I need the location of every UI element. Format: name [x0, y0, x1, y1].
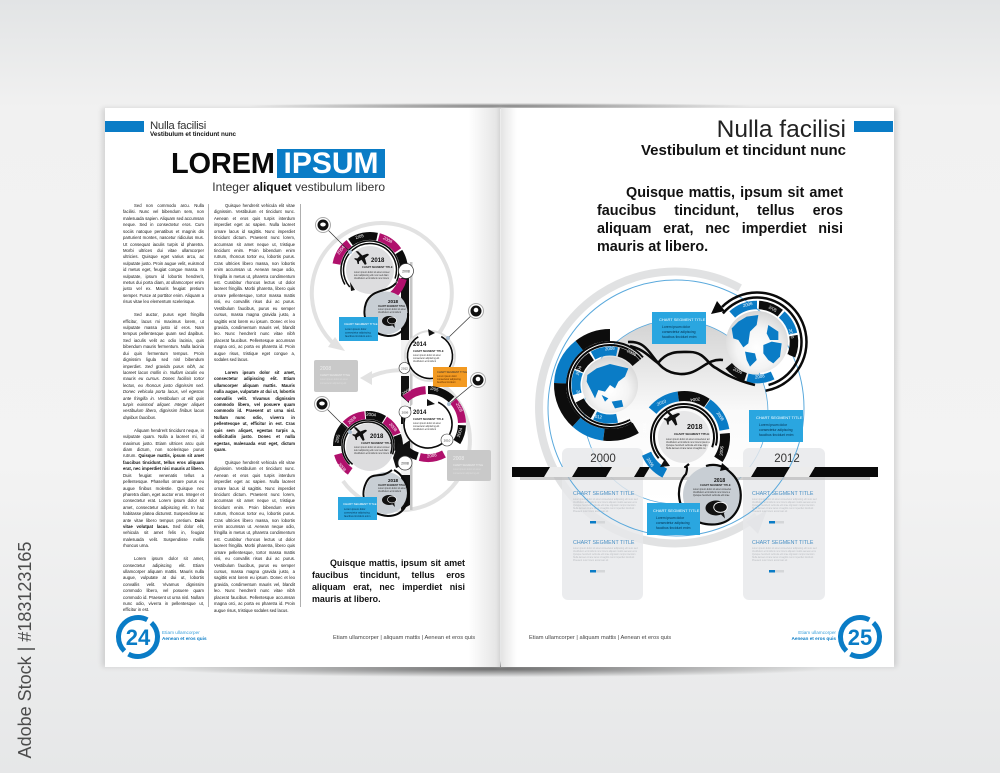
top module: 2004	[336, 244, 346, 255]
right globe module: 2010	[788, 328, 795, 340]
blue box bottom center: faucibus tincidunt enim	[656, 526, 691, 530]
blue box top center: faucibus tincidunt enim	[662, 335, 697, 339]
lower right module: 2004	[456, 427, 464, 438]
panel 2000: Vestibulum et tincidunt nunc lorem aliquam mattis aenean eros	[573, 501, 638, 504]
center module: 2010	[656, 398, 667, 407]
blue box bottom: faucibus tincidunt enim	[344, 514, 370, 518]
orange box	[433, 367, 467, 387]
center module: 2006	[719, 445, 724, 456]
panel 2012: CHART SEGMENT TITLE	[752, 491, 814, 497]
right globe continents	[732, 315, 782, 367]
orange box: CHART SEGMENT TITLE	[437, 370, 467, 374]
bottom module: Lorem ipsum dolor sit amet consectet	[693, 488, 732, 491]
panel 2012: Praesent nunc lorem accumsan sit	[752, 559, 788, 562]
text column 2: Quisque hendrerit vehicula elit vitae dignissim. Vestibulum et tincidunt nunc. Aenean et eros quis turpis interdum imperdiet eget ac sapien. Nulla laoreet ornare lacus id sagittis. Nunc imperdiet tincidunt dictum. Praesent nunc lorem, accumsan sit amet neque ut, tristique tincidunt enim. Proin bibendum enim rutrum, rhoncus tortor eu, lobortis purus. Cras ultricies libero massa, non lobortis enim accumsan ut. Aenean neque odio, fringilla in metus ut, pharetra condimentum est. Curabitur rhoncus lectus ut dolor laoreet fringilla. Morbi pharetra, libero quis ornare pellentesque, tortor massa mattis nisi, eu convallis risus dui ac purus. Vestibulum faucibus, purus eu semper cursus, massa magna gravida justo, a sagittis erat lorem eu ipsum. Donec et leo gravida, condimentum mauris vel, blandit leo. Nunc hendrerit nunc vitae nibh placerat faucibus. Pellentesque accumsan magna orci, ac porta ex pharetra id. Proin augue risus, tristique eget congue a, sodales sed lacus.	[214, 203, 295, 362]
bottom module: Vestibulum et tincidunt nunc lorem a	[693, 491, 731, 494]
center module	[626, 379, 742, 495]
left header subtitle: Vestibulum et tincidunt nunc	[150, 131, 236, 138]
top module: CHART SEGMENT TITLE	[362, 265, 393, 269]
lower right module	[380, 376, 476, 472]
lower right module: 2014	[413, 410, 427, 416]
thin blue ring	[548, 280, 804, 536]
blue box top center	[652, 312, 706, 344]
blue box bottom	[338, 497, 377, 520]
right globe module: 2006	[781, 352, 791, 364]
panel 2012: 2012	[774, 453, 800, 465]
text column 1: Aliquam hendrerit tincidunt neque, in vulputate quam. Nulla a laoreet mi, id maximus justo. Etiam ultrices arcu quis diam dictum, non scelerisque purus rutrum. Quisque mattis, ipsum sit amet faucibus tincidunt, tellus eros aliquam erat, nec imperdiet nisi mauris at libero. Duis feugiat venenatis tellus a pellentesque. Phasellus ornare purus eu augue finibus molestie. Quisque nec pharetra diam, eget auctor eros. Integer et consectetur erat. Lorem ipsum dolor sit amet, consectetur adipiscing elit. In hac habitasse platea dictumst. Suspendisse ac ante vitae libero tempus pretium. Duis vitae volutpat lacus. Sed dolor elit, vehicula sit amet felis in, feugiat malesuada velit. Suspendisse mollis rhoncus urna.	[123, 428, 204, 548]
center module: 2006	[646, 457, 655, 468]
top S-curve and lower disc: Lorem ipsum dolor sit amet	[378, 308, 406, 311]
gray box: consectetur adipiscing elit	[320, 382, 347, 385]
left infographic	[312, 218, 491, 520]
lower right module: CHART SEGMENT TITLE	[413, 417, 444, 421]
bottom module	[679, 463, 741, 524]
blue box bottom: Lorem ipsum dolor	[344, 507, 366, 511]
icon chat top	[316, 218, 352, 254]
icon chat bottom	[314, 396, 352, 434]
dividers	[208, 204, 300, 607]
left footer caption: Etiam ullamcorper	[162, 630, 200, 635]
panel 2000: CHART SEGMENT TITLE	[573, 540, 635, 546]
labels 2006 2010	[399, 406, 453, 446]
blue box right: faucibus tincidunt enim	[759, 433, 794, 437]
gray box right: 2008	[453, 456, 464, 462]
blue box right: consectetur adipiscing	[759, 428, 793, 432]
blue box top center: Lorem ipsum dolor	[662, 325, 691, 329]
panel 2000	[562, 448, 643, 600]
labels 2006 2010: 2010	[444, 438, 451, 442]
panel 2000: Vestibulum et tincidunt nunc lorem aliquam mattis aenean eros	[573, 550, 638, 553]
lower right module: 2008	[427, 452, 438, 459]
bottom-left module: tetur adipiscing elit nunc sed diam	[354, 449, 389, 452]
footer page number 24: 24	[126, 625, 151, 650]
orange box: faucibus tincidunt	[437, 381, 456, 384]
center module: 2004	[689, 397, 700, 402]
blue box top	[339, 317, 378, 341]
orange box: consectetur adipiscing	[437, 378, 461, 381]
left globe module: 2010	[576, 390, 581, 401]
bottom-left S-curve and disc: Vestibulum et tincidunt	[378, 490, 401, 493]
labels 2006 2010: 2006	[402, 410, 409, 414]
blue box bottom: consectetur adipiscing	[344, 510, 370, 514]
text column 1: Sed auctor, purus eget fringilla efficitur, lacus mi maximus lorem, ut vulputate massa justo id eros. Nam tempus pellentesque quam sed dapibus. Sed iaculis velit ac odio lacinia, quis bibendum mauris fermentum. Nulla lacinia dui quis fermentum tempus. Proin dignissim ligula sed nisl bibendum imperdiet. Sed gravida purus nibh, ac laoreet lacus mollis in. Nullam iaculis eu mauris eu cursus. Donec facilisis tortor lectus, eu rhoncus justo dignissim sed. Donec vehicula porta lacus, vel egestas ante fringilla in. Vestibulum ut elit quis turpis euismod aliquet. Integer aliquet vestibulum libero, dignissim finibus lacus dapibus faucibus.	[123, 312, 204, 420]
top S-curve and lower disc: Vestibulum et tincidunt	[378, 311, 401, 314]
lower right module: 2006	[401, 387, 412, 396]
panel 2000: Lorem ipsum dolor sit amet consectetur adipiscing elit nunc sed	[573, 547, 638, 550]
label 2008	[398, 264, 414, 278]
footer page number 25: 25	[848, 625, 872, 650]
panel 2000: CHART SEGMENT TITLE	[573, 491, 635, 497]
figure-eight connector	[628, 342, 755, 385]
blue box top center: CHART SEGMENT TITLE	[659, 317, 706, 322]
top module: 2008	[382, 235, 394, 244]
left pull quote: Quisque mattis, ipsum sit amet faucibus tincidunt, tellus eros aliquam erat, nec imperdiet nisi mauris at libero.	[312, 558, 465, 604]
panel 2012: Vestibulum et tincidunt nunc lorem aliquam mattis aenean eros	[752, 501, 817, 504]
top S-curve and lower disc: CHART SEGMENT TITLE	[378, 305, 406, 308]
bottom-left module: CHART SEGMENT TITLE	[361, 441, 392, 445]
bottom-left module: 2008	[388, 422, 399, 433]
middle module 2014: 2014	[413, 342, 427, 348]
gray box: CHART SEGMENT TITLE	[320, 373, 350, 377]
panel 2012: Nulla laoreet ornare lacus id sagittis nunc imperdiet tincidunt	[752, 556, 814, 559]
gray box right	[447, 450, 491, 481]
lower right module: Lorem ipsum dolor sit amet	[413, 422, 441, 425]
panel 2000: 2000	[590, 453, 616, 465]
gray box: Lorem ipsum dolor sit amet	[320, 378, 348, 381]
label 2012: 2012	[401, 366, 408, 370]
left globe module	[539, 314, 681, 456]
left header title: Nulla facilisi	[150, 120, 206, 132]
middle module 2014: CHART SEGMENT TITLE	[413, 349, 444, 353]
bottom-left module: 2008	[337, 462, 348, 473]
center module: Quisque hendrerit vehicula elit vitae dign	[666, 444, 708, 447]
bottom-left module: Lorem ipsum dolor sit amet consec	[354, 446, 390, 449]
blue box right: Lorem ipsum dolor	[759, 423, 788, 427]
gray box right: Lorem ipsum dolor sit amet	[453, 468, 481, 471]
headline LOREM: LOREM	[171, 148, 275, 180]
right header bar	[854, 121, 893, 132]
right infographic	[512, 271, 878, 600]
top module: Lorem ipsum dolor sit amet consec	[354, 271, 390, 274]
bottom-left module	[324, 402, 412, 490]
left page	[105, 108, 500, 667]
blue box bottom center: consectetur adipiscing	[656, 521, 690, 525]
bottom-left S-curve and disc: 2018	[388, 478, 399, 483]
right globe module: 2006	[732, 366, 744, 375]
panel 2012: Lorem ipsum dolor sit amet consectetur adipiscing elit nunc sed	[752, 547, 817, 550]
timeline strip	[512, 467, 878, 480]
top module: 2018	[371, 258, 385, 264]
icon top right	[446, 304, 484, 340]
text column 2: Lorem ipsum dolor sit amet, consectetur adipiscing elit. Etiam ullamcorper aliquam mattis. Mauris nulla augue, vulputate at dui ut, lobortis convallis velit. Vivamus dignissim commodo libero, vel posuere quam commodo id. Praesent ut urna nisl. Nullam nunc odio, viverra in pellentesque ut, efficitur in est. Cras quis sem aliquet, egestas turpis a, sollicitudin justo. Donec et nulla egestas, malesuada erat eget, dictum quam.	[214, 370, 295, 452]
panel 2000: Lorem ipsum dolor sit amet consectetur adipiscing elit nunc sed	[573, 498, 638, 501]
middle module 2014	[399, 325, 461, 387]
panel 2000: Quisque hendrerit vehicula elit vitae dignissim turpis interdum	[573, 504, 636, 507]
left header bar	[105, 121, 144, 132]
label 2008: 2008	[402, 270, 410, 274]
panel 2012: Nulla laoreet ornare lacus id sagittis nunc imperdiet tincidunt	[752, 507, 814, 510]
blue box bottom center: CHART SEGMENT TITLE	[653, 508, 700, 513]
blue box bottom: CHART SEGMENT TITLE	[343, 502, 377, 506]
panel 2000: Nulla laoreet ornare lacus id sagittis nunc imperdiet tincidunt	[573, 507, 635, 510]
center module: Nulla laoreet ornare lacus id sagittis nu	[666, 447, 706, 450]
bottom-left S-curve and disc	[363, 443, 410, 516]
center module: 2018	[687, 424, 703, 431]
bottom-left module: Vestibulum et tincidunt nunc lorem	[354, 452, 389, 455]
right footer caption	[791, 630, 836, 641]
large gray arrow arc upper	[312, 223, 452, 351]
bottom-left module: 2018	[370, 434, 384, 440]
footer page number 25	[832, 609, 888, 665]
top module	[323, 223, 417, 317]
bottom module: Quisque hendrerit vehicula elit vitae	[693, 494, 730, 497]
panel 2000: Praesent nunc lorem accumsan sit	[573, 559, 609, 562]
blue box top: consectetur adipiscing	[345, 330, 371, 334]
panel 2000: Praesent nunc lorem accumsan sit	[573, 510, 609, 513]
center module: Vestibulum et tincidunt nunc lorem ipsum a	[666, 441, 710, 444]
blue box top: CHART SEGMENT TITLE	[344, 322, 378, 326]
bottom-left module: 2/05	[334, 433, 341, 443]
right footer caption: Aenean et eros quis	[791, 636, 836, 641]
center module: Lorem ipsum dolor sit amet consectetur ad	[666, 438, 710, 441]
bottom-left S-curve and disc: Lorem ipsum dolor sit amet	[378, 487, 406, 490]
large gray arrow arc	[539, 271, 767, 543]
middle module 2014: Vestibulum et tincidunt	[413, 360, 436, 363]
panel 2012: Lorem ipsum dolor sit amet consectetur adipiscing elit nunc sed	[752, 498, 817, 501]
text column 1: Sed non commodo arcu. Nulla facilisi. Nunc vel bibendum sem, non malesuada sapien. Aliquam sed accumsan neque. Sed in consectetur eros. Cum sociis natoque penatibus et magnis dis parturient montes, nascetur ridiculus mus. Ut consequat iaculis turpis id pharetra. Morbi ultrices dui vitae ullamcorper ultricies. Quisque eget varius arcu, ac vulputate justo. Proin augue velit, euismod id metus eget, feugiat congue massa. In vulputate, ipsum id lobortis hendrerit, metus dui porta diam, at ullamcorper enim justo vel ex. Mauris feugiat pretium semper. Fusce at porttitor enim. Aliquam a risus vitae leo elementum scelerisque.	[123, 203, 204, 304]
arrowhead	[711, 301, 725, 314]
panel 2012: Praesent nunc lorem accumsan sit	[752, 510, 788, 513]
blue box top center: consectetur adipiscing	[662, 330, 696, 334]
center module: CHART SEGMENT TITLE	[674, 432, 709, 436]
top S-curve and lower disc	[364, 283, 408, 336]
lower right module: 2/05	[430, 386, 440, 393]
blue box bottom center: Lorem ipsum dolor	[656, 516, 685, 520]
bottom-left module: 2004	[366, 412, 377, 417]
bottom-left S-curve and disc: CHART SEGMENT TITLE	[378, 484, 406, 487]
left footer caption: Aenean et eros quis	[162, 636, 207, 641]
left footer caption	[162, 630, 207, 641]
right globe module: 2/05	[768, 304, 778, 313]
text column 2: Quisque hendrerit vehicula elit vitae dignissim. Vestibulum et tincidunt nunc. Aenean et eros quis turpis interdum imperdiet eget ac sapien. Nulla laoreet ornare lacus id sagittis. Nunc imperdiet tincidunt dictum. Praesent nunc lorem, accumsan sit amet neque ut, tristique tincidunt enim. Proin bibendum enim rutrum, rhoncus tortor eu, lobortis purus. Cras ultricies libero massa, non lobortis enim accumsan ut. Aenean neque odio, fringilla in metus ut, pharetra condimentum est. Curabitur rhoncus lectus ut dolor laoreet fringilla. Morbi pharetra, libero quis ornare pellentesque, tortor massa mattis nisi, eu convallis risus dui ac purus. Vestibulum faucibus, purus eu semper cursus, massa magna gravida justo, a sagittis erat lorem eu ipsum. Donec et leo gravida, condimentum mauris vel, blandit leo. Nunc hendrerit nunc vitae nibh placerat faucibus. Pellentesque accumsan magna orci, ac porta ex pharetra id. Proin augue risus, tristique sodales sed lacus.	[214, 460, 295, 613]
headline subtitle: Integer aliquet vestibulum libero	[212, 180, 385, 194]
orange box: Lorem ipsum dolor	[437, 375, 457, 378]
top S-curve and lower disc: 2018	[388, 299, 399, 304]
lower right module: consectetur adipiscing elit	[413, 425, 440, 428]
right footer note: Etiam ullamcorper | aliquam mattis | Aenean et eros quis	[529, 635, 671, 641]
blue box right: CHART SEGMENT TITLE	[756, 415, 803, 420]
panel 2000: Quisque hendrerit vehicula elit vitae dignissim turpis interdum	[573, 553, 636, 556]
panel 2012: Quisque hendrerit vehicula elit vitae dignissim turpis interdum	[752, 553, 815, 556]
blue box right	[749, 410, 803, 442]
right globe module	[687, 272, 827, 412]
right intro paragraph: Quisque mattis, ipsum sit amet faucibus tincidunt, tellus eros aliquam erat, nec imperdiet nisi mauris at libero.	[597, 185, 843, 255]
left globe module: 2006	[626, 348, 638, 357]
left globe module: 2012	[592, 413, 603, 420]
bottom module: 2018	[714, 478, 725, 484]
panel 2012	[743, 448, 825, 600]
left globe module: 2004	[575, 365, 583, 376]
blue box bottom center	[647, 503, 700, 535]
left globe module: 2008	[605, 346, 616, 351]
large gray arrow arc lower	[343, 370, 470, 510]
gray box right: consectetur adipiscing elit	[453, 472, 480, 475]
label 2012 on arc: 2012	[642, 423, 647, 433]
text column 1: Lorem ipsum dolor sit amet, consectetur adipiscing elit. Etiam ullamcorper aliquam mattis. Mauris nulla augue, vulputate at dui ut, lobortis convallis velit. Vivamus dignissim commodo libero, vel posuere quam commodo id. Praesent ut urna nisl. Nullam nunc odio, viverra in pellentesque ut, efficitur in est.	[123, 556, 204, 612]
bottom-left module: 2008	[347, 414, 358, 425]
bottom module: CHART SEGMENT TITLE	[700, 483, 731, 487]
stock id: Adobe Stock | #183123165	[15, 542, 35, 758]
vertical band	[401, 262, 412, 510]
right page	[501, 108, 894, 667]
right globe module: 2006	[742, 301, 754, 308]
icon right lower	[447, 372, 486, 406]
top module: 2/05	[355, 233, 365, 240]
top module: 2006	[389, 279, 399, 290]
center module: 2008	[715, 411, 725, 422]
label 2008 lower	[398, 456, 412, 470]
background shadows	[250, 103, 750, 109]
right globe module: 2008	[755, 373, 766, 380]
top module: tetur adipiscing elit nunc sed diam	[354, 274, 389, 277]
middle module 2014: Lorem ipsum dolor sit amet	[413, 354, 441, 357]
panel 2000: Nulla laoreet ornare lacus id sagittis nunc imperdiet tincidunt	[573, 556, 635, 559]
gray box	[314, 360, 358, 392]
right footer caption: Etiam ullamcorper	[798, 630, 836, 635]
text column 1	[122, 203, 204, 612]
label 2008 lower: 2008	[401, 462, 409, 466]
top module: Vestibulum et tincidunt nunc lorem	[354, 277, 389, 280]
right header title: Nulla facilisi	[717, 116, 846, 143]
blue box top: faucibus tincidunt enim	[345, 334, 371, 338]
blue box top: Lorem ipsum dolor	[345, 327, 367, 331]
lower right module: 2008	[455, 402, 464, 413]
text column 2	[214, 203, 295, 613]
middle module 2014: consectetur adipiscing elit	[413, 357, 440, 360]
panel 2012: Vestibulum et tincidunt nunc lorem aliquam mattis aenean eros	[752, 550, 817, 553]
left footer note: Etiam ullamcorper | aliquam mattis | Aenean et eros quis	[333, 635, 475, 641]
gray box: 2008	[320, 366, 331, 372]
gray box right: CHART SEGMENT TITLE	[453, 463, 483, 467]
panel 2012: Quisque hendrerit vehicula elit vitae dignissim turpis interdum	[752, 504, 815, 507]
inner gradient disc	[584, 320, 768, 504]
footer page number 24	[110, 609, 166, 665]
right header subtitle: Vestibulum et tincidunt nunc	[641, 142, 846, 159]
page shadow	[170, 661, 820, 677]
left globe continents	[587, 364, 628, 408]
left globe module: 2006	[619, 416, 630, 423]
headline IPSUM: IPSUM	[283, 147, 378, 180]
label 2012	[399, 362, 410, 374]
panel 2012: CHART SEGMENT TITLE	[752, 540, 814, 546]
lower right module: Vestibulum et tincidunt	[413, 428, 436, 431]
